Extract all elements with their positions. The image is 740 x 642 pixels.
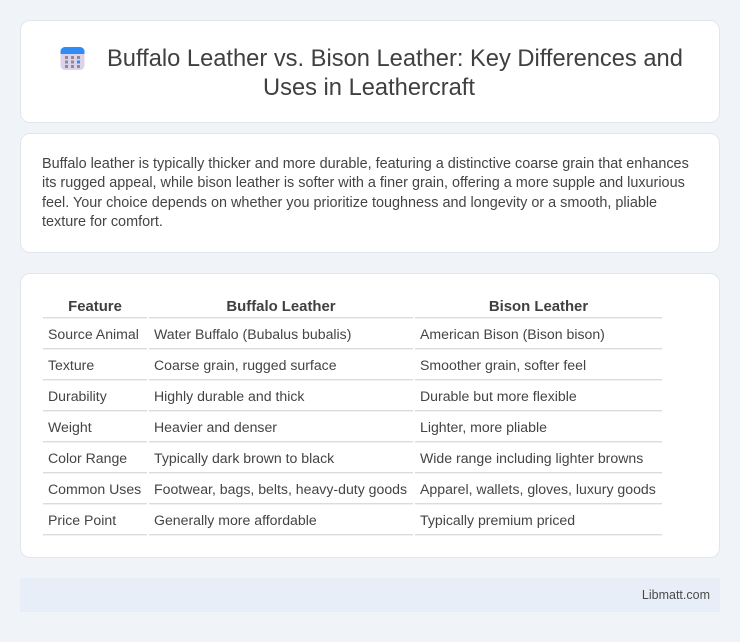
table rows: Typically premium priced — [420, 512, 575, 528]
table rows: Footwear, bags, belts, heavy-duty goods — [154, 481, 407, 497]
table rows: Durability — [48, 388, 107, 404]
table rows: Apparel, wallets, gloves, luxury goods — [420, 481, 656, 497]
intro paragraph: Buffalo leather is typically thicker and more durable, featuring a distinctive coarse grain that enhances — [42, 156, 689, 172]
table rows: Lighter, more pliable — [420, 419, 547, 435]
table rows: Smoother grain, softer feel — [420, 357, 586, 373]
table rows: Coarse grain, rugged surface — [154, 357, 337, 373]
table rows: Heavier and denser — [154, 419, 277, 435]
intro paragraph: texture for comfort. — [42, 214, 163, 230]
title: Buffalo Leather vs. Bison Leather: Key Differences and — [107, 46, 683, 72]
table rows: Texture — [48, 357, 94, 373]
table rows: Color Range — [48, 450, 127, 466]
title: Uses in Leathercraft — [263, 75, 475, 101]
table rows — [43, 317, 662, 536]
table rows: American Bison (Bison bison) — [420, 326, 605, 342]
panel: comparison table — [20, 273, 720, 558]
icon: calendar — [60, 47, 84, 70]
title — [107, 46, 683, 101]
panel: title card — [20, 20, 720, 123]
table rows: Price Point — [48, 512, 116, 528]
table headings: Feature — [68, 299, 122, 315]
table rows: Water Buffalo (Bubalus bubalis) — [154, 326, 351, 342]
table rows: Weight — [48, 419, 92, 435]
panel: intro text — [20, 133, 720, 253]
table rows: Common Uses — [48, 481, 141, 497]
footer text: Libmatt.com — [642, 588, 710, 602]
table headings — [68, 299, 588, 315]
table rows: Generally more affordable — [154, 512, 317, 528]
table rows: Durable but more flexible — [420, 388, 577, 404]
intro paragraph: its rugged appeal, while bison leather is softer with a finer grain, offering a more supple and luxurious — [42, 175, 685, 191]
table headings: Buffalo Leather — [226, 299, 336, 315]
table rows: Source Animal — [48, 326, 139, 342]
footer bar — [20, 578, 720, 612]
intro paragraph: feel. Your choice depends on whether you prioritize toughness and longevity or a smooth, pliable — [42, 195, 657, 211]
table rows: Typically dark brown to black — [154, 450, 334, 466]
intro paragraph — [42, 156, 689, 230]
table headings: Bison Leather — [489, 299, 588, 315]
table rows: Highly durable and thick — [154, 388, 304, 404]
table rows: Wide range including lighter browns — [420, 450, 643, 466]
